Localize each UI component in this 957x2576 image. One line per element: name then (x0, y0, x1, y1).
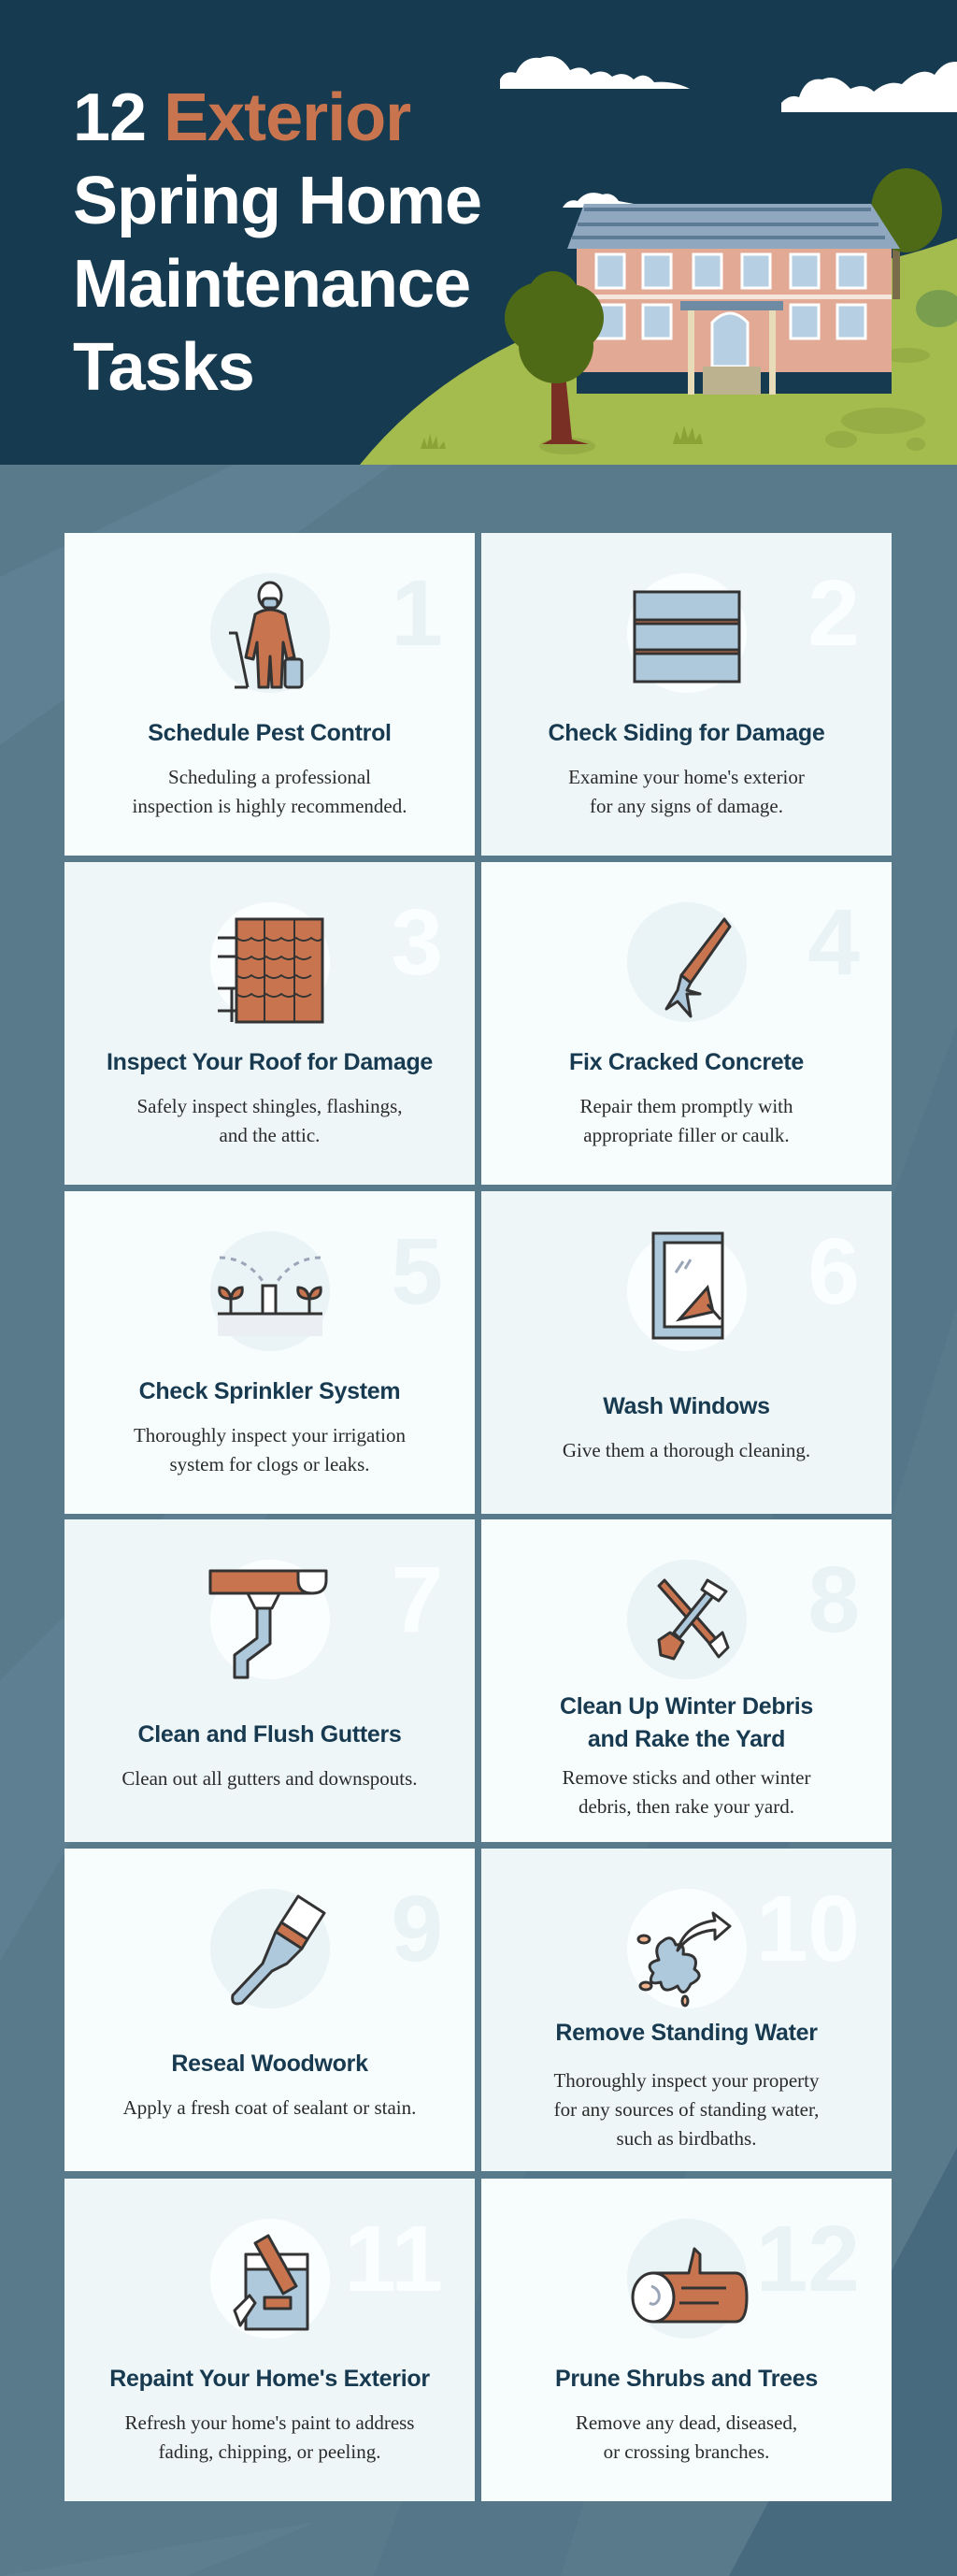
heading: Check Siding for Damage (549, 720, 824, 746)
card 3 (64, 862, 475, 1185)
title: Spring Home (73, 164, 481, 238)
description: Repair them promptly with (579, 1095, 793, 1117)
description: Refresh your home's paint to address (125, 2411, 414, 2434)
icon: roof shingles (218, 918, 323, 1023)
heading: Wash Windows (603, 1393, 770, 1419)
card 6 (481, 1191, 892, 1514)
heading: Fix Cracked Concrete (569, 1049, 804, 1075)
description (563, 1765, 811, 1818)
description: such as birdbaths. (617, 2126, 756, 2149)
description: Thoroughly inspect your property (553, 2068, 820, 2091)
number: 4 (807, 890, 860, 995)
card 7 (64, 1519, 475, 1842)
description: Scheduling a professional (168, 766, 371, 788)
description (568, 766, 805, 817)
icon: log (632, 2248, 748, 2323)
heading: Reseal Woodwork (171, 2050, 368, 2076)
description: appropriate filler or caulk. (583, 1124, 790, 1146)
number: 7 (391, 1547, 443, 1652)
illustration: house on hill (360, 56, 957, 465)
description: for any signs of damage. (590, 795, 783, 817)
heading (560, 1692, 813, 1752)
card 1 (64, 533, 475, 856)
description: fading, chipping, or peeling. (159, 2440, 380, 2463)
description: inspection is highly recommended. (133, 795, 407, 817)
number: 8 (807, 1547, 860, 1652)
card 5 (64, 1191, 475, 1514)
icon: window squeegee (652, 1232, 723, 1339)
card 4 (481, 862, 892, 1185)
heading: and Rake the Yard (588, 1726, 785, 1752)
card 12 (481, 2179, 892, 2501)
icon: siding (634, 591, 740, 683)
description: Give them a thorough cleaning. (563, 1438, 810, 1461)
description (125, 2411, 414, 2463)
icon: pest control worker (229, 582, 303, 688)
heading: Schedule Pest Control (148, 720, 392, 746)
description: Apply a fresh coat of sealant or stain. (123, 2096, 416, 2119)
card 8 (481, 1519, 892, 1842)
icon: gutter (209, 1569, 327, 1679)
card 10 (481, 1849, 892, 2171)
title: Maintenance (73, 247, 470, 322)
description (579, 1095, 793, 1146)
icon: caulk gun (665, 917, 731, 1017)
header (0, 0, 957, 465)
heading: Clean Up Winter Debris (560, 1692, 813, 1719)
title (73, 80, 481, 405)
number: 9 (391, 1877, 443, 1981)
description (576, 2411, 797, 2463)
description: Remove sticks and other winter (563, 1765, 810, 1788)
description (553, 2068, 820, 2149)
icon: water puddle with arrow (637, 1911, 732, 2007)
number: 2 (807, 561, 860, 666)
title: Tasks (73, 330, 254, 405)
heading: Prune Shrubs and Trees (555, 2366, 818, 2392)
number: 6 (807, 1219, 860, 1324)
icon: paintbrush (231, 1894, 326, 2005)
description: Clean out all gutters and downspouts. (121, 1767, 418, 1790)
description: for any sources of standing water, (554, 2098, 819, 2121)
description (136, 1095, 403, 1146)
heading: Inspect Your Roof for Damage (107, 1049, 433, 1075)
heading: Clean and Flush Gutters (137, 1720, 402, 1747)
title: 12 Exterior (73, 80, 410, 155)
number: 12 (756, 2207, 860, 2311)
card 2 (481, 533, 892, 856)
description: Thoroughly inspect your irrigation (134, 1424, 406, 1446)
number: 11 (344, 2207, 443, 2311)
description: or crossing branches. (604, 2440, 769, 2463)
icon: paint bucket and roller (234, 2234, 308, 2330)
heading: Check Sprinkler System (139, 1378, 400, 1404)
number: 10 (756, 1877, 860, 1981)
icon: sprinkler (218, 1257, 322, 1336)
description: debris, then rake your yard. (578, 1795, 794, 1818)
heading: Repaint Your Home's Exterior (109, 2366, 430, 2392)
number: 1 (391, 561, 443, 666)
number: 5 (391, 1219, 443, 1324)
description (133, 766, 407, 817)
description: Remove any dead, diseased, (576, 2411, 797, 2434)
icon: shovel and rake (657, 1578, 729, 1661)
description: and the attic. (220, 1124, 320, 1146)
heading: Remove Standing Water (555, 2020, 818, 2046)
description: system for clogs or leaks. (169, 1453, 370, 1475)
description: Safely inspect shingles, flashings, (136, 1095, 403, 1117)
description: Examine your home's exterior (568, 766, 805, 788)
card 9 (64, 1849, 475, 2171)
description (134, 1424, 406, 1475)
number: 3 (391, 890, 443, 995)
card 11 (64, 2179, 475, 2501)
